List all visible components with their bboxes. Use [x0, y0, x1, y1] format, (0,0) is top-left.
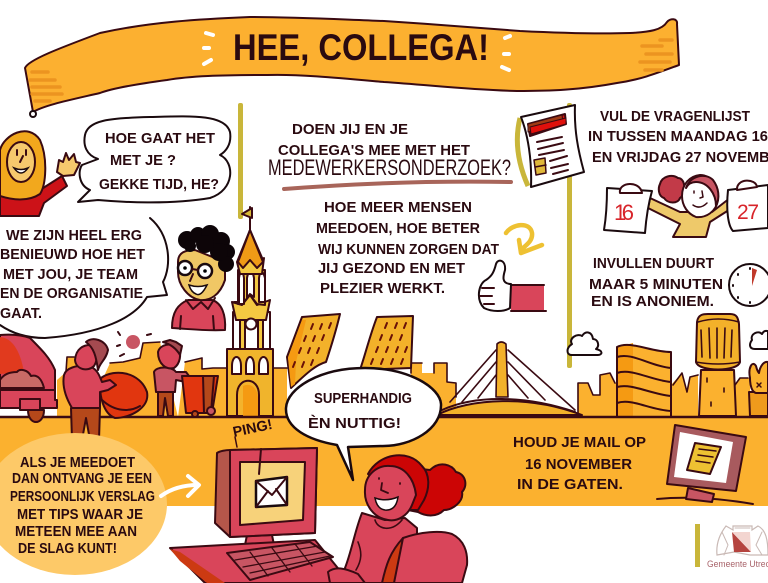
man with bin	[154, 340, 218, 417]
intro question: COLLEGA'S MEE MET HET	[278, 142, 470, 159]
speech bubble: hoe gaat het: MET JE ?	[110, 152, 176, 169]
speech bubble: benieuwd: EN DE ORGANISATIE	[0, 285, 143, 302]
ping text: PING!	[232, 417, 274, 441]
bridge	[437, 342, 582, 415]
man with glasses	[172, 225, 235, 330]
survey period text: VUL DE VRAGENLIJST	[600, 108, 750, 125]
intro question: MEDEWERKERSONDERZOEK?	[268, 155, 511, 180]
callout: personal report: ALS JE MEEDOET	[20, 455, 135, 471]
speech bubble: superhandig	[286, 368, 441, 480]
why participate text: WIJ KUNNEN ZORGEN DAT	[318, 241, 499, 258]
slanted building left	[287, 314, 340, 388]
mail reminder text: HOUD JE MAIL OP	[513, 434, 646, 451]
arrow to computer	[161, 476, 199, 496]
dom tower	[227, 207, 273, 416]
speech bubble: superhandig: SUPERHANDIG	[314, 390, 412, 407]
logo: Gemeente Utrecht	[707, 526, 768, 570]
callout: personal report: DAN ONTVANG JE EEN	[12, 471, 152, 487]
person holding calendars: 27	[737, 201, 759, 224]
woman waving	[0, 131, 80, 216]
flying ball	[117, 332, 151, 356]
duration text: INVULLEN DUURT	[593, 255, 714, 272]
skyline	[0, 207, 768, 506]
clouds	[568, 332, 602, 355]
speech bubble: hoe gaat het: HOE GAAT HET	[105, 130, 215, 147]
icon: yellow arrow	[506, 225, 542, 253]
why participate text: PLEZIER WERKT.	[320, 280, 445, 297]
callout: personal report: DE SLAG KUNT!	[18, 541, 117, 557]
envelope icon	[256, 477, 287, 507]
icon: thumbs up	[479, 261, 546, 311]
speech bubble: hoe gaat het: GEKKE TIJD, HE?	[99, 176, 219, 193]
water tower	[696, 314, 740, 416]
why participate text: MEEDOEN, HOE BETER	[316, 220, 480, 237]
duration text: EN IS ANONIEM.	[591, 293, 714, 310]
yellow skyline silhouettes	[57, 342, 750, 417]
survey period text: IN TUSSEN MAANDAG 16	[588, 128, 768, 145]
orange band	[0, 417, 768, 506]
why participate text	[316, 199, 499, 297]
speech bubble: benieuwd	[0, 218, 168, 338]
slanted building right	[360, 316, 413, 370]
icon: survey document	[517, 105, 584, 187]
why participate text: HOE MEER MENSEN	[324, 199, 472, 216]
callout: personal report	[0, 433, 167, 575]
callout: personal report: METEEN MEE AAN	[15, 524, 137, 540]
truck	[0, 335, 57, 422]
speech bubble: hoe gaat het	[78, 116, 230, 202]
callout: personal report: MET TIPS WAAR JE	[17, 507, 143, 523]
mail reminder text	[513, 434, 646, 493]
computer with email	[170, 448, 350, 583]
woman at computer	[328, 455, 467, 583]
survey period text	[588, 108, 768, 166]
speech bubble: superhandig: ÈN NUTTIG!	[308, 415, 401, 432]
man carrying bag	[63, 339, 147, 445]
monitor with document	[657, 425, 753, 504]
icon: clock	[729, 264, 768, 306]
duration text: MAAR 5 MINUTEN	[589, 276, 723, 293]
speech bubble: benieuwd: GAAT.	[0, 305, 42, 322]
mail reminder text: 16 NOVEMBER	[525, 456, 632, 473]
ground line	[0, 416, 768, 418]
rabbit	[749, 362, 768, 416]
speech bubble: benieuwd: BENIEUWD HOE HET	[0, 246, 145, 263]
intro question: DOEN JIJ EN JE	[292, 121, 408, 138]
speech bubble: benieuwd: WE ZIJN HEEL ERG	[6, 227, 142, 244]
why participate text: JIJ GEZOND EN MET	[318, 260, 465, 277]
mail reminder text: IN DE GATEN.	[517, 476, 623, 493]
banner title text: HEE, COLLEGA!	[233, 27, 489, 68]
person holding calendars	[604, 175, 768, 237]
title banner	[25, 17, 679, 117]
dividers	[238, 103, 700, 567]
duration text	[589, 255, 723, 310]
speech bubble: benieuwd: MET JOU, JE TEAM	[3, 266, 138, 283]
intro question	[268, 121, 511, 189]
callout: personal report: PERSOONLIJK VERSLAG	[10, 489, 155, 505]
person holding calendars: 16	[614, 200, 634, 225]
wavy building	[617, 343, 671, 417]
